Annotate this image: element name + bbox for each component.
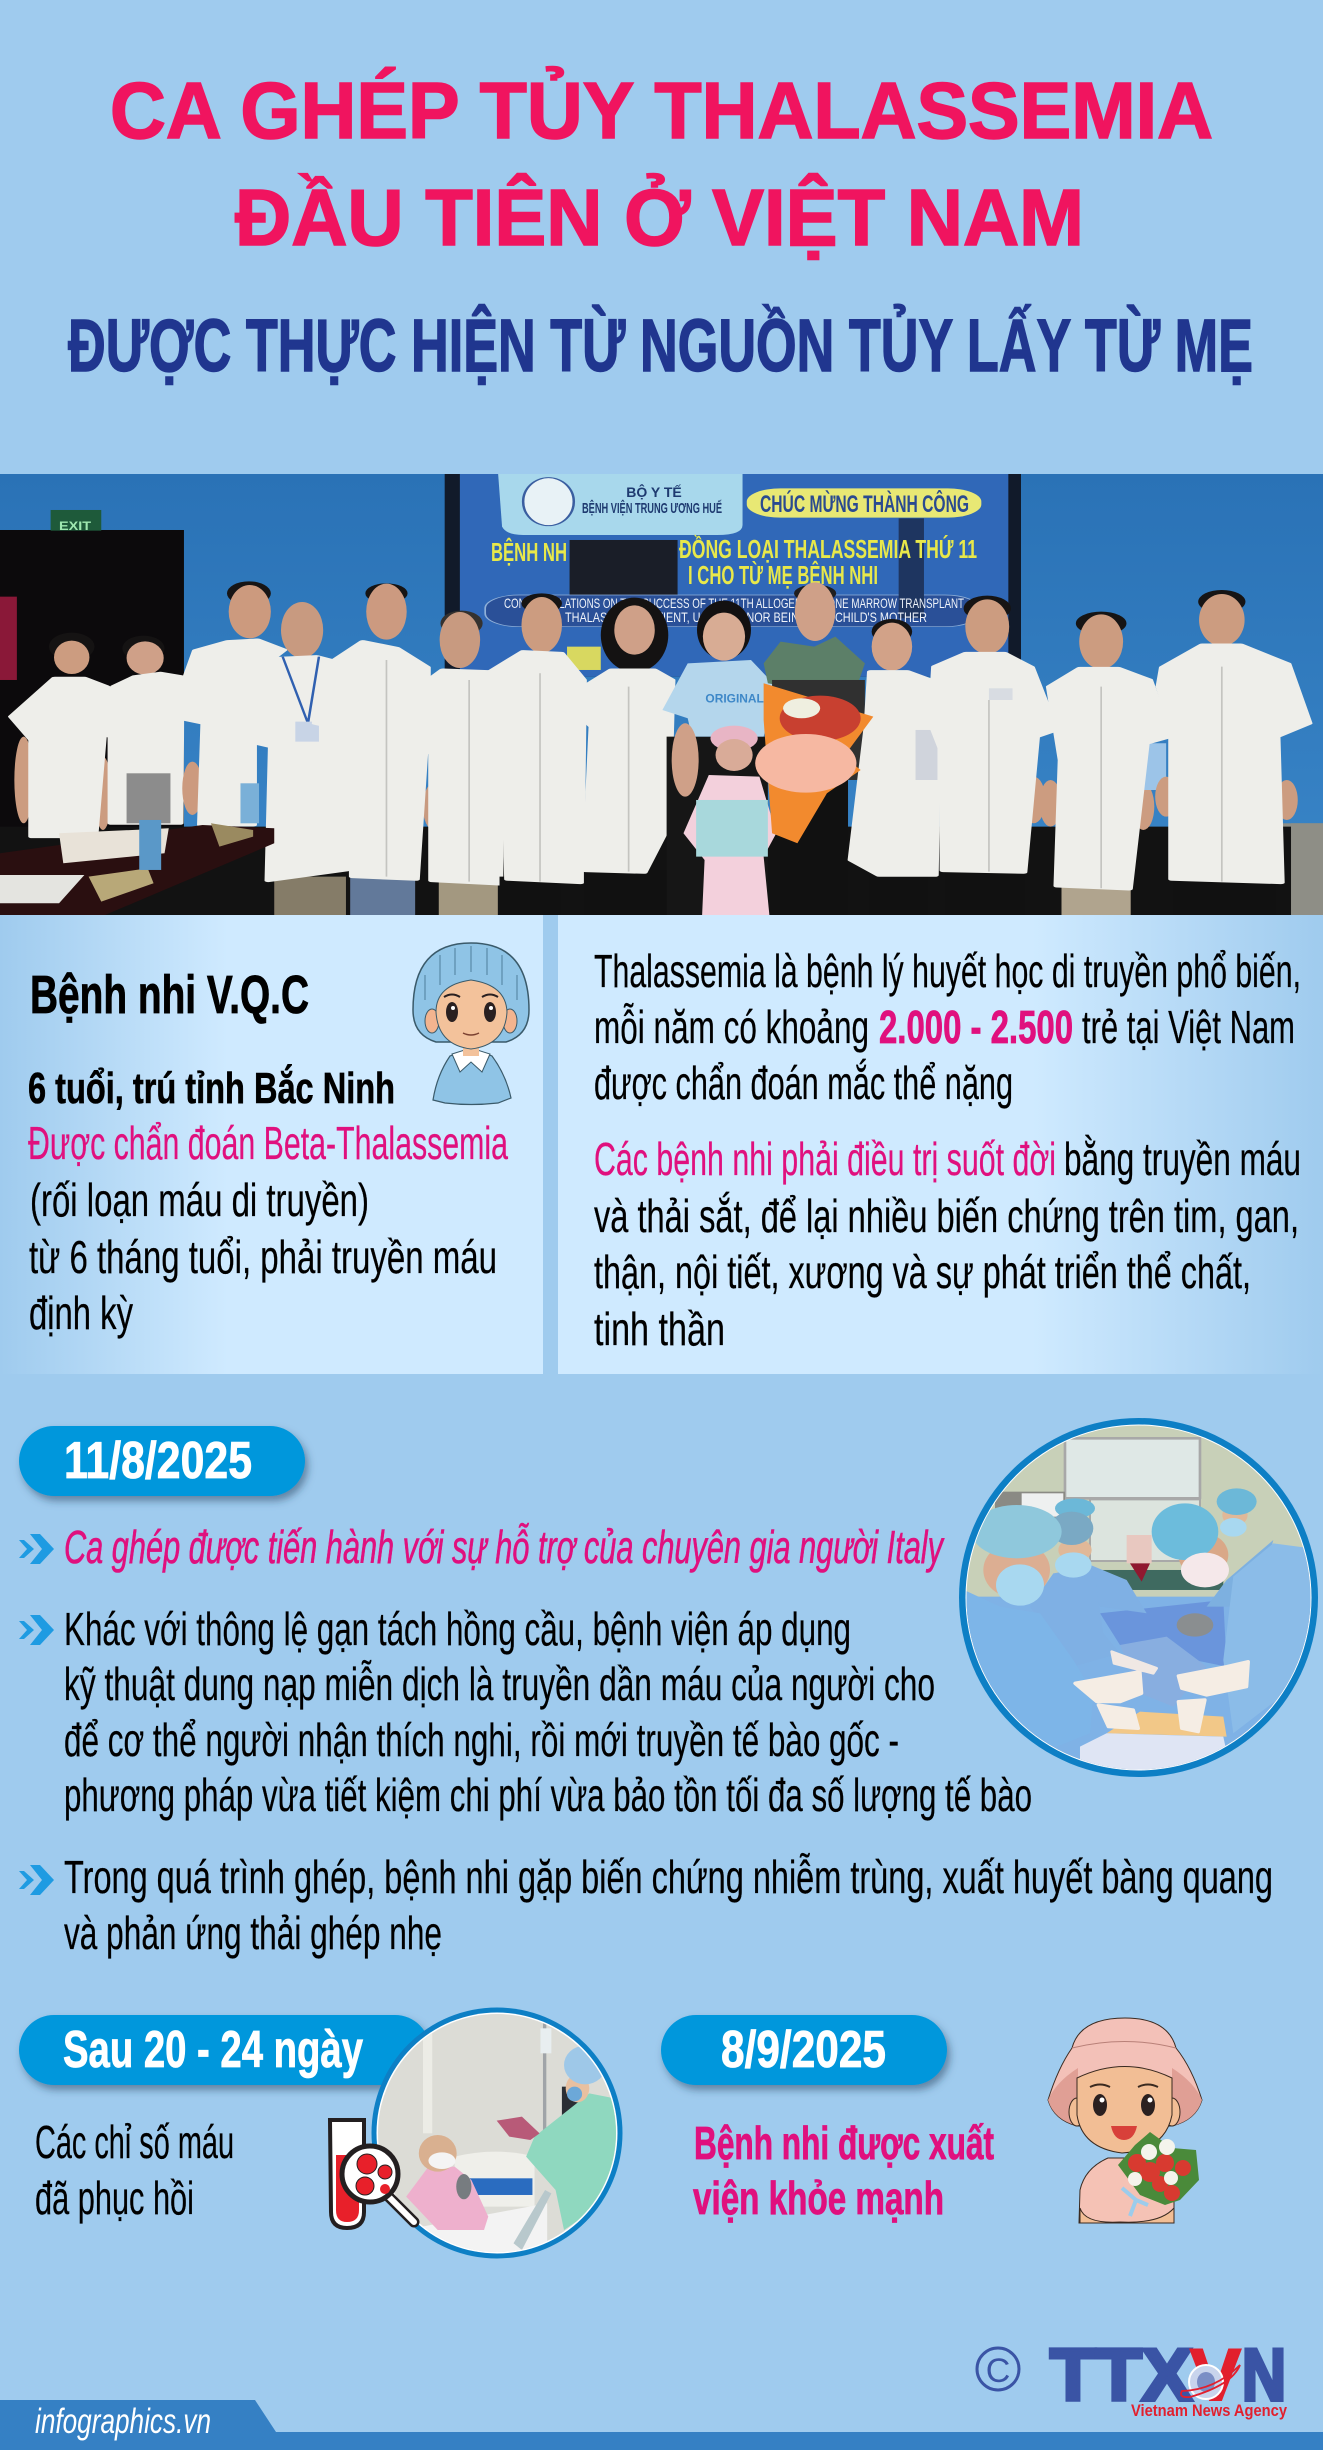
copyright mark [977,2348,1019,2390]
person 10 [764,582,865,827]
flower bouquet [755,683,873,843]
bullet: complications [19,1851,1273,1959]
patient details: từ 6 tháng tuổi, phải truyền máu [29,1231,497,1283]
person 6 [428,610,504,886]
text: discharged healthy: viện khỏe mạnh [693,2172,944,2224]
photo: surgical team [957,1417,1323,1783]
icon: blood test tube with magnifier [330,2120,414,2228]
bullet: immune tolerance technique: kỹ thuật dung nạp miễn dịch là truyền dần máu của người cho [64,1658,935,1710]
date pill: 8/9/2025: 8/9/2025 [721,2021,886,2079]
person 8 [584,598,676,884]
person 1 [12,633,111,837]
paragraph: prevalence: được chẩn đoán mắc thể nặng [594,1057,1013,1109]
person 14 [1155,590,1309,917]
panel: thalassemia facts [558,915,1323,1374]
group photo: CONGRATULATIONS ON THE SUCCESS OF THE 11TH ALLOGENEIC BONE MARROW TRANSPLANT [504,595,964,611]
text: blood indices recovered [35,2116,234,2224]
person 7 [488,593,587,886]
logo: TTXVN [1050,2335,1287,2420]
bullet: immune tolerance technique: để cơ thể người nhận thích nghi, rồi mới truyền tế bào gốc - [64,1714,899,1766]
date pill: Sau 20 - 24 ngày [19,2015,430,2085]
title [110,66,1213,262]
title: CA GHÉP TỦY THALASSEMIA [110,66,1213,155]
person 12 [930,596,1054,874]
bullet: Italian experts [19,1521,945,1573]
child with gift [683,726,776,917]
text: discharged healthy [693,2117,994,2224]
person 2 [100,636,181,823]
paragraph: prevalence [594,945,1301,1109]
date pill: 11/8/2025: 11/8/2025 [64,1432,252,1490]
logo: TTXVN: Vietnam News Agency [1131,2401,1287,2420]
panel: patient profile [0,915,543,1374]
group photo: BỘ Y TẾ [626,483,682,500]
text: discharged healthy: Bệnh nhi được xuất [694,2117,994,2169]
date pill: 11/8/2025 [19,1426,305,1496]
paragraph: prevalence: mỗi năm có khoảng [594,1001,869,1053]
group photo: I CHO TỪ MẸ BỆNH NHI [688,560,878,590]
logo: TTXVN: TTX [1050,2335,1192,2416]
date pill: Sau 20 - 24 ngày: Sau 20 - 24 ngày [63,2021,363,2079]
icon: healthy child with hat and flowers [1048,2018,1202,2223]
title: ĐẦU TIÊN Ở VIỆT NAM [235,173,1084,262]
bullet: complications: và phản ứng thải ghép nhẹ [64,1907,442,1959]
text: blood indices recovered: Các chỉ số máu [35,2116,234,2168]
paragraph: treatment burden: tinh thần [594,1303,725,1355]
table with bottles and papers [0,783,274,917]
bullet: immune tolerance technique: Khác với thông lệ gạn tách hồng cầu, bệnh viện áp dụng [64,1603,851,1655]
bullet: immune tolerance technique [19,1603,1032,1821]
person 11 [851,619,937,917]
patient details: Được chẩn đoán Beta-Thalassemia [28,1117,508,1169]
patient details: định kỳ [29,1287,133,1339]
group photo [0,470,1323,917]
group photo: EXIT [59,519,92,533]
photo: child in hospital bed [370,2007,623,2263]
paragraph: prevalence: 2.000 - 2.500 [879,1001,1073,1053]
icon: child patient in surgical cap [413,943,529,1104]
footer band [0,2400,1323,2450]
person 13 [1040,612,1170,889]
person 5 [316,583,445,879]
text: blood indices recovered: đã phục hồi [35,2172,194,2224]
group photo: ĐỒNG LOẠI THALASSEMIA THỨ 11 [679,534,977,564]
paragraph: treatment burden [594,1133,1301,1355]
heading: Bệnh nhi V.Q.C [30,965,309,1025]
person 3 [172,581,284,825]
group photo: BỆNH NH [491,537,567,567]
date pill: 8/9/2025 [661,2015,947,2085]
patient details: 6 tuổi, trú tỉnh Bắc Ninh [28,1063,395,1113]
person 9: ORIGINAL [705,692,764,706]
group photo: CHÚC MỪNG THÀNH CÔNG [760,490,969,518]
group photo: BỆNH VIỆN TRUNG ƯƠNG HUẾ [582,499,722,517]
person 9 [662,600,772,836]
patient details [28,1063,508,1339]
group photo: THALASSEMIA PATIENT, USING DONOR BEING THE CHILD'S MOTHER [565,609,927,625]
patient details: (rối loạn máu di truyền) [30,1174,369,1226]
logo: TTXVN: V [1190,2335,1241,2416]
person 4 [256,602,349,882]
paragraph: treatment burden: Các bệnh nhi phải điều trị suốt đời [594,1133,1056,1185]
source credit: infographics.vn [35,2402,211,2441]
logo: TTXVN: N [1242,2335,1286,2416]
copyright mark: C [986,2352,1010,2390]
